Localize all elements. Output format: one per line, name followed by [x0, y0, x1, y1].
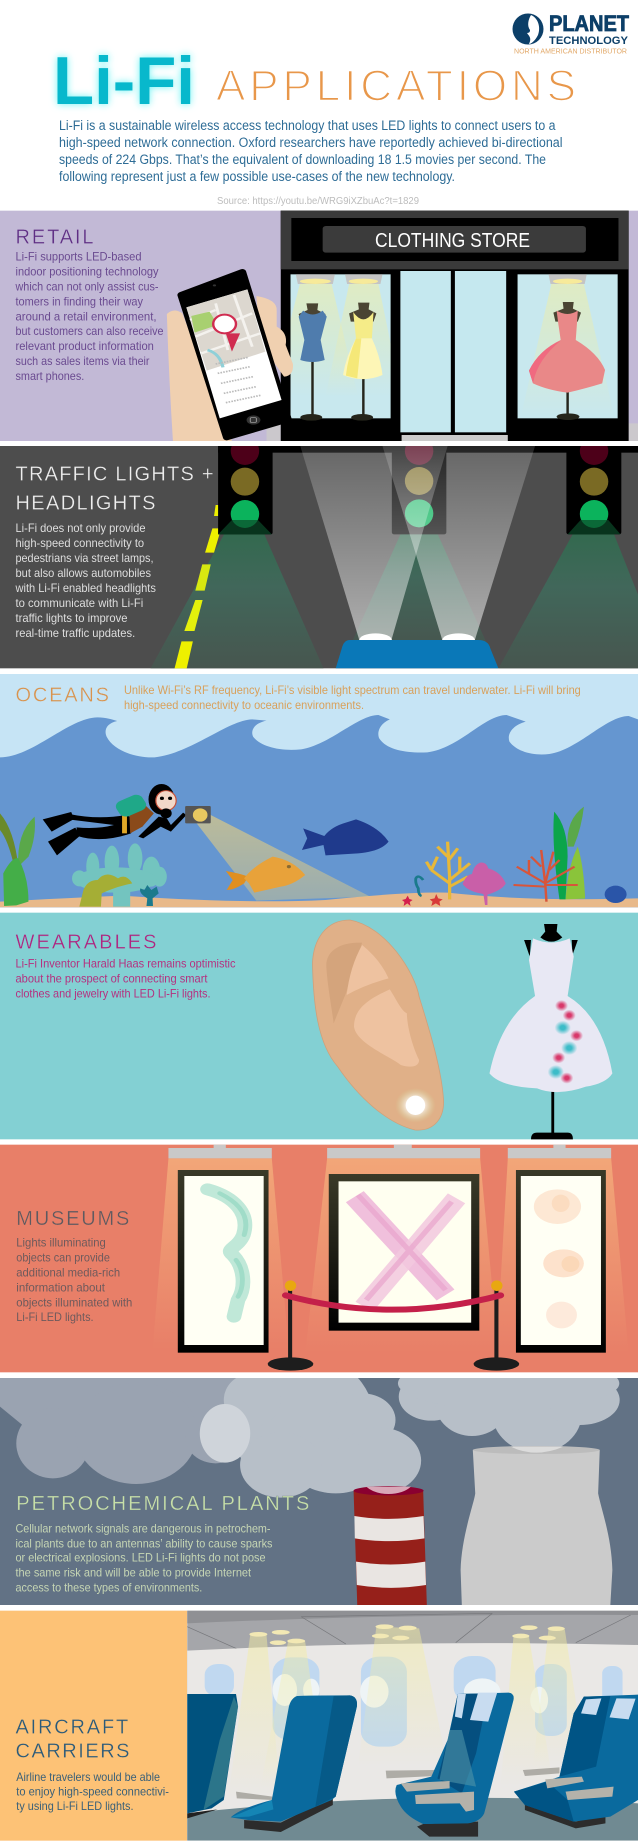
text: aircraft body	[16, 1770, 169, 1813]
text: traffic body: Li-Fi does not only provide	[16, 521, 146, 535]
artwork: teal brush stroke	[178, 1170, 269, 1353]
logo: Planet Technology: TECHNOLOGY	[549, 35, 629, 47]
seat: second	[231, 1695, 357, 1832]
waves and water	[0, 715, 638, 907]
ocean illustration	[0, 674, 638, 907]
panel: aircraft carriers	[0, 1611, 638, 1841]
clouds in windows	[273, 1674, 548, 1713]
panel: petrochemical plants	[0, 1353, 638, 1605]
icon: orange fish	[226, 857, 305, 893]
heading: oceans: OCEANS	[16, 685, 109, 707]
text: traffic body: but also allows automobiles	[16, 566, 151, 580]
panel: museums	[0, 1145, 638, 1372]
text: retail body: Li-Fi supports LED-based	[16, 250, 142, 264]
text: traffic body: real-time traffic updates.	[16, 626, 135, 640]
icon: hand holding phone	[167, 272, 293, 441]
smoke cloud: right	[398, 1378, 620, 1446]
icon: starfish	[402, 896, 413, 906]
panel: wearables	[0, 913, 638, 1139]
text: traffic body: traffic lights to improve	[16, 611, 128, 625]
smoke cloud: left	[0, 1378, 252, 1484]
coral: pink	[463, 863, 506, 905]
text: petrochemical body: access to these types of environments.	[16, 1581, 202, 1595]
seaweed: left	[0, 813, 35, 906]
text: traffic body: high-speed connectivity to	[16, 536, 144, 550]
text: petrochemical body: ical plants due to an antennas’ ability to cause sparks	[16, 1536, 272, 1550]
ceiling lights	[249, 1624, 565, 1645]
light beam	[196, 813, 370, 901]
text: traffic body: with Li-Fi enabled headlights	[15, 581, 156, 595]
intro paragraph: Li-Fi is a sustainable wireless access technology that uses LED lights to connect users to a	[59, 118, 556, 133]
sand	[0, 893, 638, 907]
cabin shell	[187, 1611, 638, 1841]
icon: diver	[43, 784, 211, 855]
icon: ear with LED earring	[312, 920, 444, 1130]
gallery lights	[153, 1145, 629, 1353]
text: traffic body	[15, 521, 156, 640]
text: retail body: smart phones.	[16, 369, 84, 383]
intro paragraph: speeds of 224 Gbps. That’s the equivalent of downloading 18 1.5 movies per second. The	[59, 152, 546, 167]
icon: seahorse	[416, 877, 423, 896]
intro paragraph: following represent just a few possible use-cases of the new technology.	[59, 169, 455, 184]
stanchions and rope	[268, 1280, 519, 1371]
logo: Planet Technology: PLANET	[549, 11, 630, 36]
windows	[205, 1656, 623, 1747]
text: oceans body	[124, 683, 581, 712]
text: retail body: tomers in finding their way	[16, 295, 143, 309]
panel: traffic lights and headlights	[0, 437, 638, 670]
intro paragraph: high-speed network connection. Oxford researchers have reportedly achieved bi-directional	[59, 135, 562, 150]
heading: aircraft carriers	[16, 1716, 130, 1763]
museum illustration	[0, 1145, 638, 1372]
text: aircraft body: ty using Li-Fi LED lights.	[16, 1799, 133, 1813]
car	[336, 633, 498, 668]
text: retail body: relevant product information	[16, 339, 154, 353]
petrochemical illustration	[0, 1353, 638, 1605]
sign: clothing store: CLOTHING STORE	[375, 230, 530, 252]
heading: traffic lights + headlights: HEADLIGHTS	[16, 492, 156, 514]
icon: blue fish	[302, 819, 389, 855]
icon: shell	[605, 886, 627, 903]
text: aircraft body: Airline travelers would be able	[16, 1770, 160, 1784]
text: wearables body: about the prospect of connecting smart	[16, 972, 208, 986]
panel: retail	[0, 211, 638, 441]
aircraft illustration	[0, 1611, 638, 1841]
intro paragraph	[59, 118, 562, 184]
text: petrochemical body	[16, 1521, 272, 1595]
text: retail body: but customers can also receive	[16, 324, 164, 338]
road dashes	[174, 505, 220, 670]
heading: aircraft carriers: AIRCRAFT	[16, 1716, 128, 1738]
text: retail body: around a retail environment,	[16, 310, 156, 324]
coral: yellow	[426, 842, 470, 899]
text: oceans body: Unlike Wi-Fi’s RF frequency, Li-Fi’s visible light spectrum can travel underwater. Li-Fi will bring	[124, 683, 581, 697]
heading: traffic lights + headlights	[16, 464, 214, 514]
heading: museums: MUSEUMS	[16, 1208, 129, 1230]
header	[53, 11, 630, 207]
mannequin: yellow dress	[343, 303, 382, 421]
coral: teal cluster	[72, 843, 167, 907]
text: aircraft body: to enjoy high-speed connectivi-	[16, 1785, 169, 1799]
text: traffic body: to communicate with Li-Fi	[16, 596, 143, 610]
text: petrochemical body: the same risk and will be able to provide Internet	[16, 1566, 252, 1580]
text: petrochemical body: or electrical explosions. LED Li-Fi lights do not pose	[16, 1551, 266, 1565]
store front	[281, 211, 629, 441]
text: wearables body	[16, 957, 236, 1001]
panel: oceans	[0, 674, 638, 907]
text: museums body	[16, 1236, 132, 1324]
wearables illustration	[0, 913, 638, 1139]
seat: left	[187, 1694, 238, 1818]
chimney	[354, 1486, 427, 1605]
text: retail body: which can not only assist cus-	[15, 280, 158, 294]
logo: Planet Technology: NORTH AMERICAN DISTRIBUTOR	[514, 48, 627, 56]
traffic illustration	[0, 437, 638, 670]
text: traffic body: pedestrians via street lamps,	[16, 551, 154, 565]
text: museums body: objects can provide	[16, 1251, 110, 1265]
heading: wearables: WEARABLES	[16, 931, 156, 953]
title: Applications: APPLICATIONS	[216, 62, 576, 111]
seaweed: right	[553, 807, 585, 899]
cooling tower	[461, 1446, 612, 1605]
window lights	[291, 274, 614, 417]
text: museums body: Lights illuminating	[16, 1236, 106, 1250]
source line: Source: https://youtu.be/WRG9iXZbuAc?t=1829	[217, 195, 419, 207]
logo: Planet Technology	[512, 11, 630, 56]
mannequin: pink dress	[529, 302, 605, 420]
rear armrests	[236, 1767, 559, 1800]
heading: retail: RETAIL	[16, 226, 94, 248]
seat: third	[395, 1693, 514, 1837]
coral: red	[513, 850, 578, 902]
text: retail body	[15, 250, 164, 383]
heading: aircraft carriers: CARRIERS	[16, 1741, 130, 1763]
title: Li-Fi: Li-Fi	[53, 43, 195, 119]
seat: right	[514, 1695, 638, 1828]
text: museums body: Li-Fi LED lights.	[16, 1310, 94, 1324]
green light beams	[151, 520, 323, 668]
traffic lights	[218, 437, 638, 534]
text: retail body: such as sales items via their	[16, 354, 150, 368]
icon: starfish	[430, 894, 443, 906]
text: retail body: indoor positioning technology	[16, 265, 158, 279]
retail illustration	[0, 211, 638, 441]
text: museums body: additional media-rich	[16, 1266, 120, 1280]
text: petrochemical body: Cellular network signals are dangerous in petrochem-	[16, 1521, 270, 1535]
text: wearables body: Li-Fi Inventor Harald Haas remains optimistic	[16, 957, 236, 971]
heading: traffic lights + headlights: TRAFFIC LIGHTS +	[16, 464, 214, 486]
text: museums body: information about	[16, 1281, 106, 1295]
ceiling light beams	[234, 1627, 577, 1776]
headlight beams	[300, 446, 448, 640]
icon: LED dress on stand	[489, 924, 612, 1139]
mannequin: blue dress	[299, 303, 327, 421]
text: museums body: objects illuminated with	[16, 1296, 132, 1310]
text: oceans body: high-speed connectivity to oceanic environments.	[124, 698, 364, 712]
text: wearables body: clothes and jewelry with LED Li-Fi lights.	[16, 987, 210, 1001]
heading: petrochemical plants: PETROCHEMICAL PLANTS	[16, 1493, 309, 1515]
artwork: pink X	[329, 1174, 479, 1331]
artwork: peach blots	[516, 1170, 606, 1353]
smoke cloud: centre	[224, 1378, 422, 1498]
